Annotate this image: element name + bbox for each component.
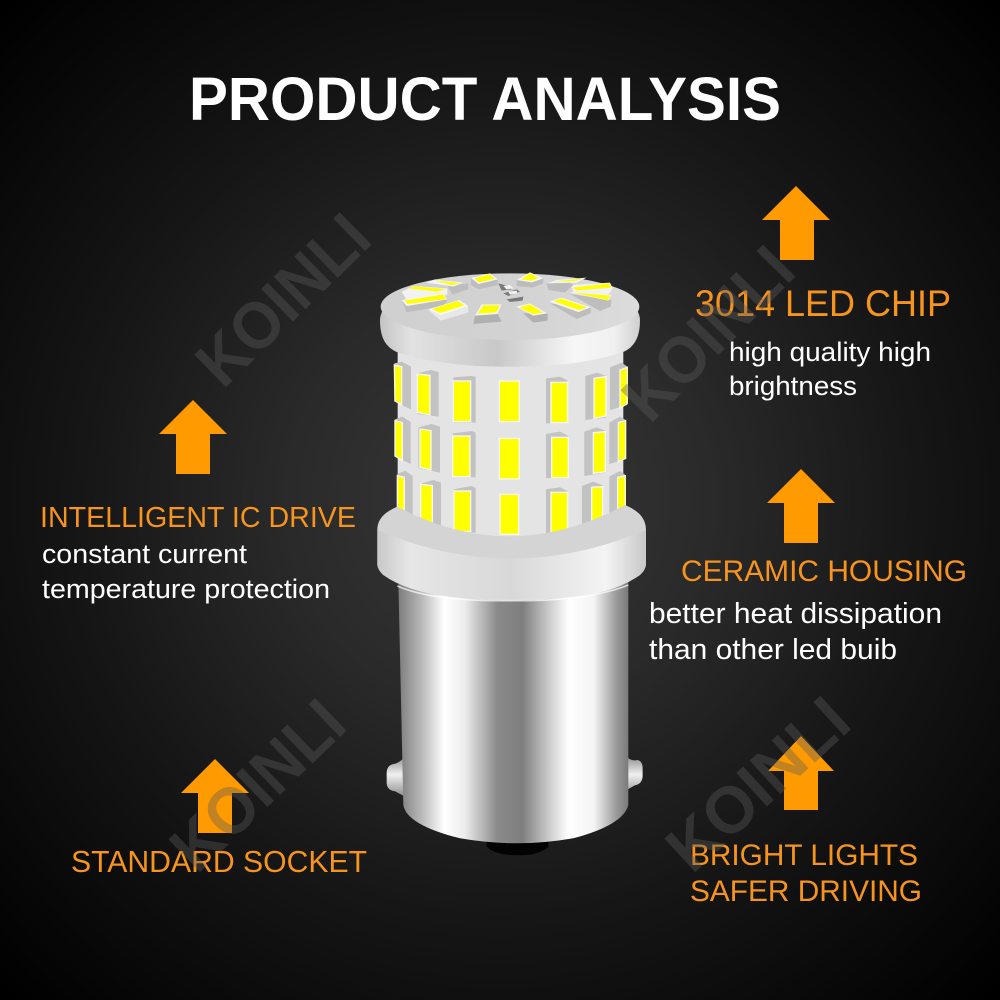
text: constant current temperature protection: constant current — [42, 539, 248, 569]
heading: standard socket: STANDARD SOCKET — [71, 845, 367, 879]
text: better heat dissipation: better heat dissipation — [649, 598, 942, 630]
watermarks: KOINLI — [181, 199, 384, 400]
yellow chips — [394, 365, 627, 534]
side chips — [394, 362, 627, 533]
text: better heat dissipation: than other led buib — [649, 634, 897, 666]
heading: intelligent IC drive: INTELLIGENT IC DRIVE — [40, 502, 356, 534]
text: high quality high brightness — [729, 337, 931, 401]
bulb metal socket — [387, 580, 643, 855]
watermarks: KOINLI — [155, 685, 359, 885]
heading: 3014 LED chip: 3014 LED CHIP — [695, 283, 951, 324]
heading: bright lights safer driving: BRIGHT LIGHTS — [690, 839, 918, 872]
heading: bright lights safer driving: SAFER DRIVING — [690, 875, 922, 908]
arrow: standard socket — [181, 759, 249, 833]
watermarks: KOINLI — [607, 232, 808, 435]
text: better heat dissipation — [649, 598, 942, 666]
title: PRODUCT ANALYSIS — [189, 65, 781, 133]
heading: ceramic housing: CERAMIC HOUSING — [681, 555, 967, 588]
watermarks — [155, 199, 864, 885]
metal barrel — [398, 580, 628, 843]
arrow: bright lights — [768, 736, 834, 810]
LED bulb illustration — [377, 272, 646, 855]
text: high quality high brightness: brightness — [729, 371, 857, 401]
arrow: ceramic housing — [767, 469, 835, 543]
text: constant current temperature protection: temperature protection — [42, 574, 330, 604]
top surface chips — [402, 272, 613, 324]
bottom contact — [487, 840, 548, 855]
arrow: intelligent IC drive — [159, 400, 227, 474]
top ceramic cap — [380, 272, 640, 367]
text: constant current temperature protection — [42, 539, 330, 604]
watermarks: KOINLI — [651, 682, 864, 885]
locking pins — [387, 757, 643, 797]
LED column body — [394, 347, 627, 543]
heading: bright lights safer driving — [690, 839, 922, 908]
text: high quality high brightness: high quality high — [729, 337, 931, 367]
arrow: 3014 LED chip — [762, 186, 830, 260]
flange collar — [377, 505, 646, 601]
